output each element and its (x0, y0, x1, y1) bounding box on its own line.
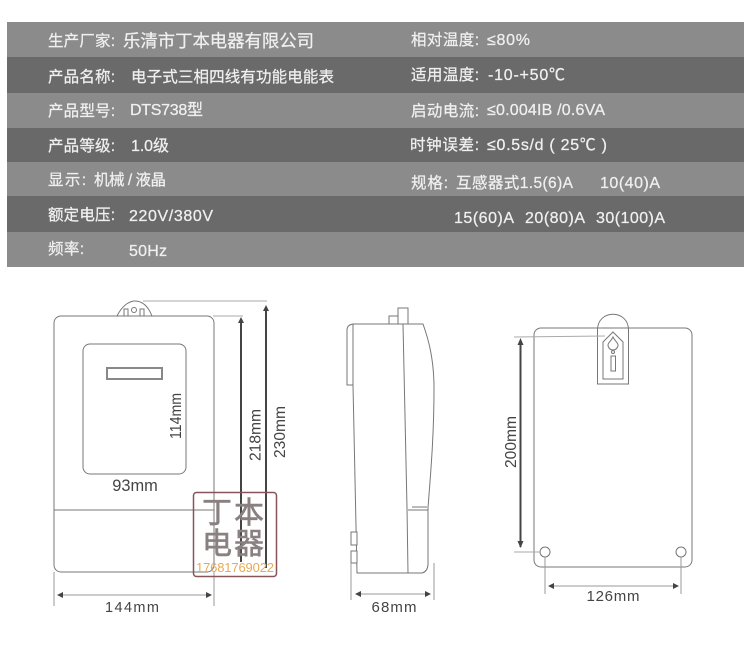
114mm label: 114mm (168, 393, 185, 439)
specification line two (454, 210, 665, 227)
top mounting tabs (389, 308, 408, 324)
specification line one: 规格: (411, 174, 448, 192)
product model: DTS738型 (130, 101, 203, 119)
hanging tab (117, 301, 152, 316)
dimension 68mm arrow (351, 563, 434, 600)
display: 显示: (48, 172, 86, 189)
product name: 电子式三相四线有功能电能表 (131, 68, 334, 86)
specification line two: 20(80)A (525, 210, 585, 227)
meter body outline (54, 316, 214, 572)
clock error (410, 136, 607, 154)
side view diagram (347, 308, 434, 616)
dimension 126mm arrow (545, 557, 681, 594)
rear view diagram (503, 314, 692, 605)
terminal cover line (408, 507, 428, 510)
dimension 218mm arrow (213, 316, 244, 562)
rated voltage: 220V/380V (129, 208, 213, 225)
dimension 144mm arrow (54, 572, 214, 606)
display window (83, 344, 186, 474)
mounting holes (540, 547, 686, 557)
rated voltage: 额定电压: (48, 206, 115, 224)
manufacturer: 生产厂家: (48, 32, 115, 50)
frequency (48, 240, 167, 260)
93mm label: 93mm (112, 477, 158, 495)
144mm label: 144mm (105, 600, 159, 616)
panel: specification table (7, 22, 744, 267)
product class: 产品等级: (48, 137, 115, 155)
specification line one: 互感器式1.5(6)A (456, 174, 574, 192)
product model (48, 101, 203, 120)
rated voltage (48, 206, 213, 225)
bottom side tabs (351, 532, 357, 563)
specification line two: 30(100)A (596, 210, 665, 227)
clock error: 时钟误差: (410, 136, 479, 154)
starting current (411, 102, 605, 120)
230mm label: 230mm (272, 406, 289, 458)
starting current: ≤0.004IB /0.6VA (487, 102, 605, 119)
specification line one: 10(40)A (600, 175, 660, 192)
watermark stamp (194, 488, 276, 576)
product class (48, 137, 169, 155)
watermark stamp: 17681769022 (196, 560, 274, 575)
product class: 1.0级 (131, 137, 169, 155)
watermark stamp: 丁本 (202, 488, 264, 532)
126mm label: 126mm (586, 588, 640, 605)
display slot (107, 368, 162, 379)
product model: 产品型号: (48, 102, 115, 120)
display (48, 171, 166, 189)
relative humidity (411, 31, 530, 49)
specification line two: 15(60)A (454, 210, 514, 227)
frequency: 50Hz (129, 243, 167, 260)
operating temperature: -10-+50℃ (488, 67, 565, 84)
200mm label: 200mm (503, 416, 520, 468)
dimension 230mm arrow (143, 301, 269, 568)
operating temperature (411, 66, 565, 84)
specification line one (411, 174, 660, 192)
clock error: ≤0.5s/d ( 25℃ ) (487, 137, 607, 154)
dimension 200mm arrow (514, 336, 605, 552)
operating temperature: 适用温度: (411, 66, 479, 84)
watermark stamp: 电器 (202, 519, 264, 563)
product name (48, 68, 334, 86)
starting current: 启动电流: (411, 102, 479, 120)
front lip (347, 324, 353, 385)
relative humidity: ≤80% (487, 32, 530, 49)
manufacturer: 乐清市丁本电器有限公司 (123, 31, 314, 51)
case seam (403, 324, 408, 573)
relative humidity: 相对温度: (411, 31, 479, 49)
product name: 产品名称: (48, 68, 115, 86)
side profile outline (353, 324, 434, 573)
rear body outline (534, 328, 692, 567)
frequency: 频率: (48, 240, 84, 258)
front view diagram (54, 301, 289, 616)
display: 机械 / 液晶 (94, 171, 166, 189)
218mm label: 218mm (248, 409, 264, 461)
terminal cover divider (54, 509, 214, 511)
keyhole hanger plate (598, 314, 628, 384)
68mm label: 68mm (372, 599, 416, 616)
